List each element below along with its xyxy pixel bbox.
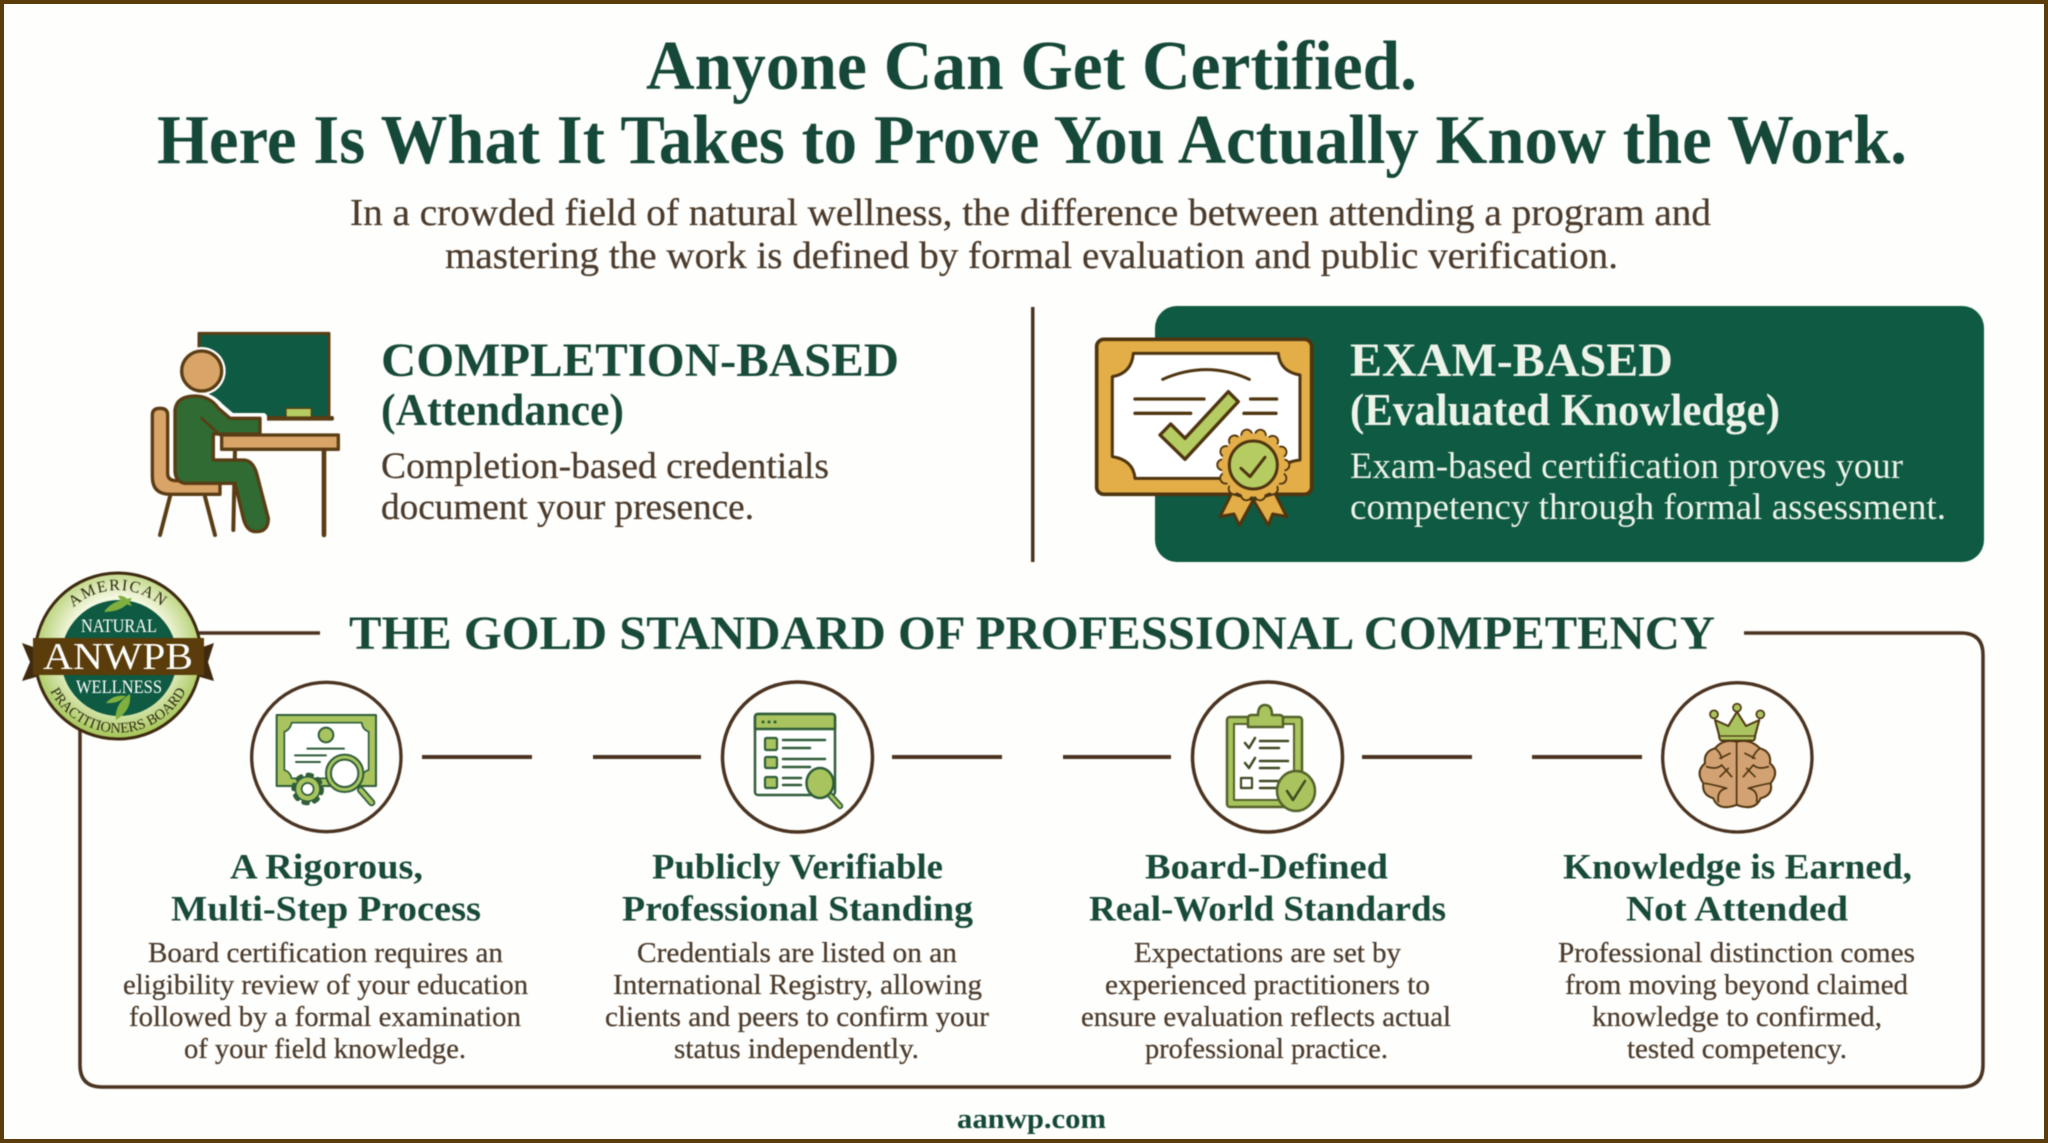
completion-based heading [381, 334, 899, 435]
step 3 heading: Real-World Standards [1089, 888, 1446, 928]
logo leaves [104, 596, 132, 720]
completion-based text: Completion-based credentials [381, 446, 829, 487]
step 1 text: of your field knowledge. [184, 1034, 466, 1065]
exam-based text [1350, 446, 1946, 528]
step 4 text: knowledge to confirmed, [1592, 1002, 1882, 1033]
completion-based text [381, 446, 829, 528]
logo text: AMERICAN [70, 579, 168, 608]
step 4 text: from moving beyond claimed [1565, 970, 1908, 1001]
step 2 text [605, 938, 990, 1065]
step 3 text: Expectations are set by [1134, 938, 1401, 969]
completion-based text: document your presence. [381, 487, 754, 528]
completion-based heading: (Attendance) [381, 384, 624, 435]
step 4: knowledge earned [1558, 683, 1915, 1065]
step 1 text: followed by a formal examination [129, 1002, 521, 1033]
exam-based heading: EXAM-BASED [1350, 334, 1673, 387]
subtitle: mastering the work is defined by formal evaluation and public verification. [445, 235, 1618, 277]
connectors [422, 755, 1642, 759]
icon: registry window with magnifier [722, 682, 872, 832]
logo badge [22, 570, 214, 742]
logo text: NATURAL [81, 616, 157, 637]
step 2 heading: Professional Standing [622, 888, 973, 928]
icon: brain with crown [1663, 683, 1812, 832]
step 4 heading: Knowledge is Earned, [1563, 846, 1912, 886]
step 2 text: status independently. [674, 1034, 919, 1065]
icon: certificate with seal [1097, 339, 1312, 525]
logo text: WELLNESS [76, 677, 162, 698]
logo text: ANWPB [43, 636, 193, 678]
step 3: board-defined standards [1081, 682, 1451, 1065]
logo text: PRACTITIONERS BOARD [50, 686, 185, 734]
title: Anyone Can Get Certified. [646, 28, 1417, 105]
step 1: rigorous process [123, 682, 528, 1065]
panel: exam-based [1097, 306, 1984, 562]
footer: website: aanwp.com [957, 1104, 1106, 1135]
step 1 heading: Multi-Step Process [171, 888, 481, 928]
step 4 text [1558, 938, 1915, 1065]
step 2 text: Credentials are listed on an [637, 938, 957, 969]
step 4 heading: Not Attended [1626, 888, 1848, 928]
step 1 text [123, 938, 528, 1065]
step 2: verifiable standing [605, 682, 990, 1065]
step 4 heading [1563, 846, 1912, 928]
subtitle: In a crowded field of natural wellness, the difference between attending a program and [350, 192, 1711, 234]
step 2 heading: Publicly Verifiable [652, 846, 943, 886]
step 3 text: experienced practitioners to [1105, 970, 1430, 1001]
step 3 heading [1089, 846, 1446, 928]
step 2 text: International Registry, allowing [613, 970, 982, 1001]
step 1 text: Board certification requires an [148, 938, 503, 969]
exam-based heading: (Evaluated Knowledge) [1350, 384, 1780, 435]
completion-based heading: COMPLETION-BASED [381, 334, 899, 387]
step 1 heading [171, 846, 481, 928]
exam-based text: Exam-based certification proves your [1350, 446, 1903, 487]
title [157, 28, 1907, 179]
logo text [42, 579, 193, 734]
step 3 text [1081, 938, 1451, 1065]
step 4 text: Professional distinction comes [1558, 938, 1915, 969]
panel frame: gold standard [80, 633, 1983, 1087]
step 2 text: clients and peers to confirm your [605, 1002, 990, 1033]
panel: completion-based [152, 333, 899, 535]
step 2 heading [622, 846, 973, 928]
step 3 text: professional practice. [1145, 1034, 1388, 1065]
step 3 text: ensure evaluation reflects actual [1081, 1002, 1451, 1033]
divider [1031, 307, 1034, 562]
icon: person at desk with chalkboard [152, 333, 338, 535]
exam-based heading [1350, 334, 1780, 435]
subtitle [350, 192, 1711, 277]
step 4 text: tested competency. [1627, 1034, 1847, 1065]
heading: gold standard: THE GOLD STANDARD OF PROFESSIONAL COMPETENCY [349, 607, 1715, 660]
icon: certificate with gear and magnifier [252, 682, 401, 832]
step 1 text: eligibility review of your education [123, 970, 528, 1001]
exam-based text: competency through formal assessment. [1350, 487, 1946, 528]
step 1 heading: A Rigorous, [230, 846, 423, 886]
icon: clipboard with checkmark [1192, 682, 1342, 832]
step 3 heading: Board-Defined [1145, 846, 1388, 886]
title: Here Is What It Takes to Prove You Actually Know the Work. [157, 102, 1907, 179]
